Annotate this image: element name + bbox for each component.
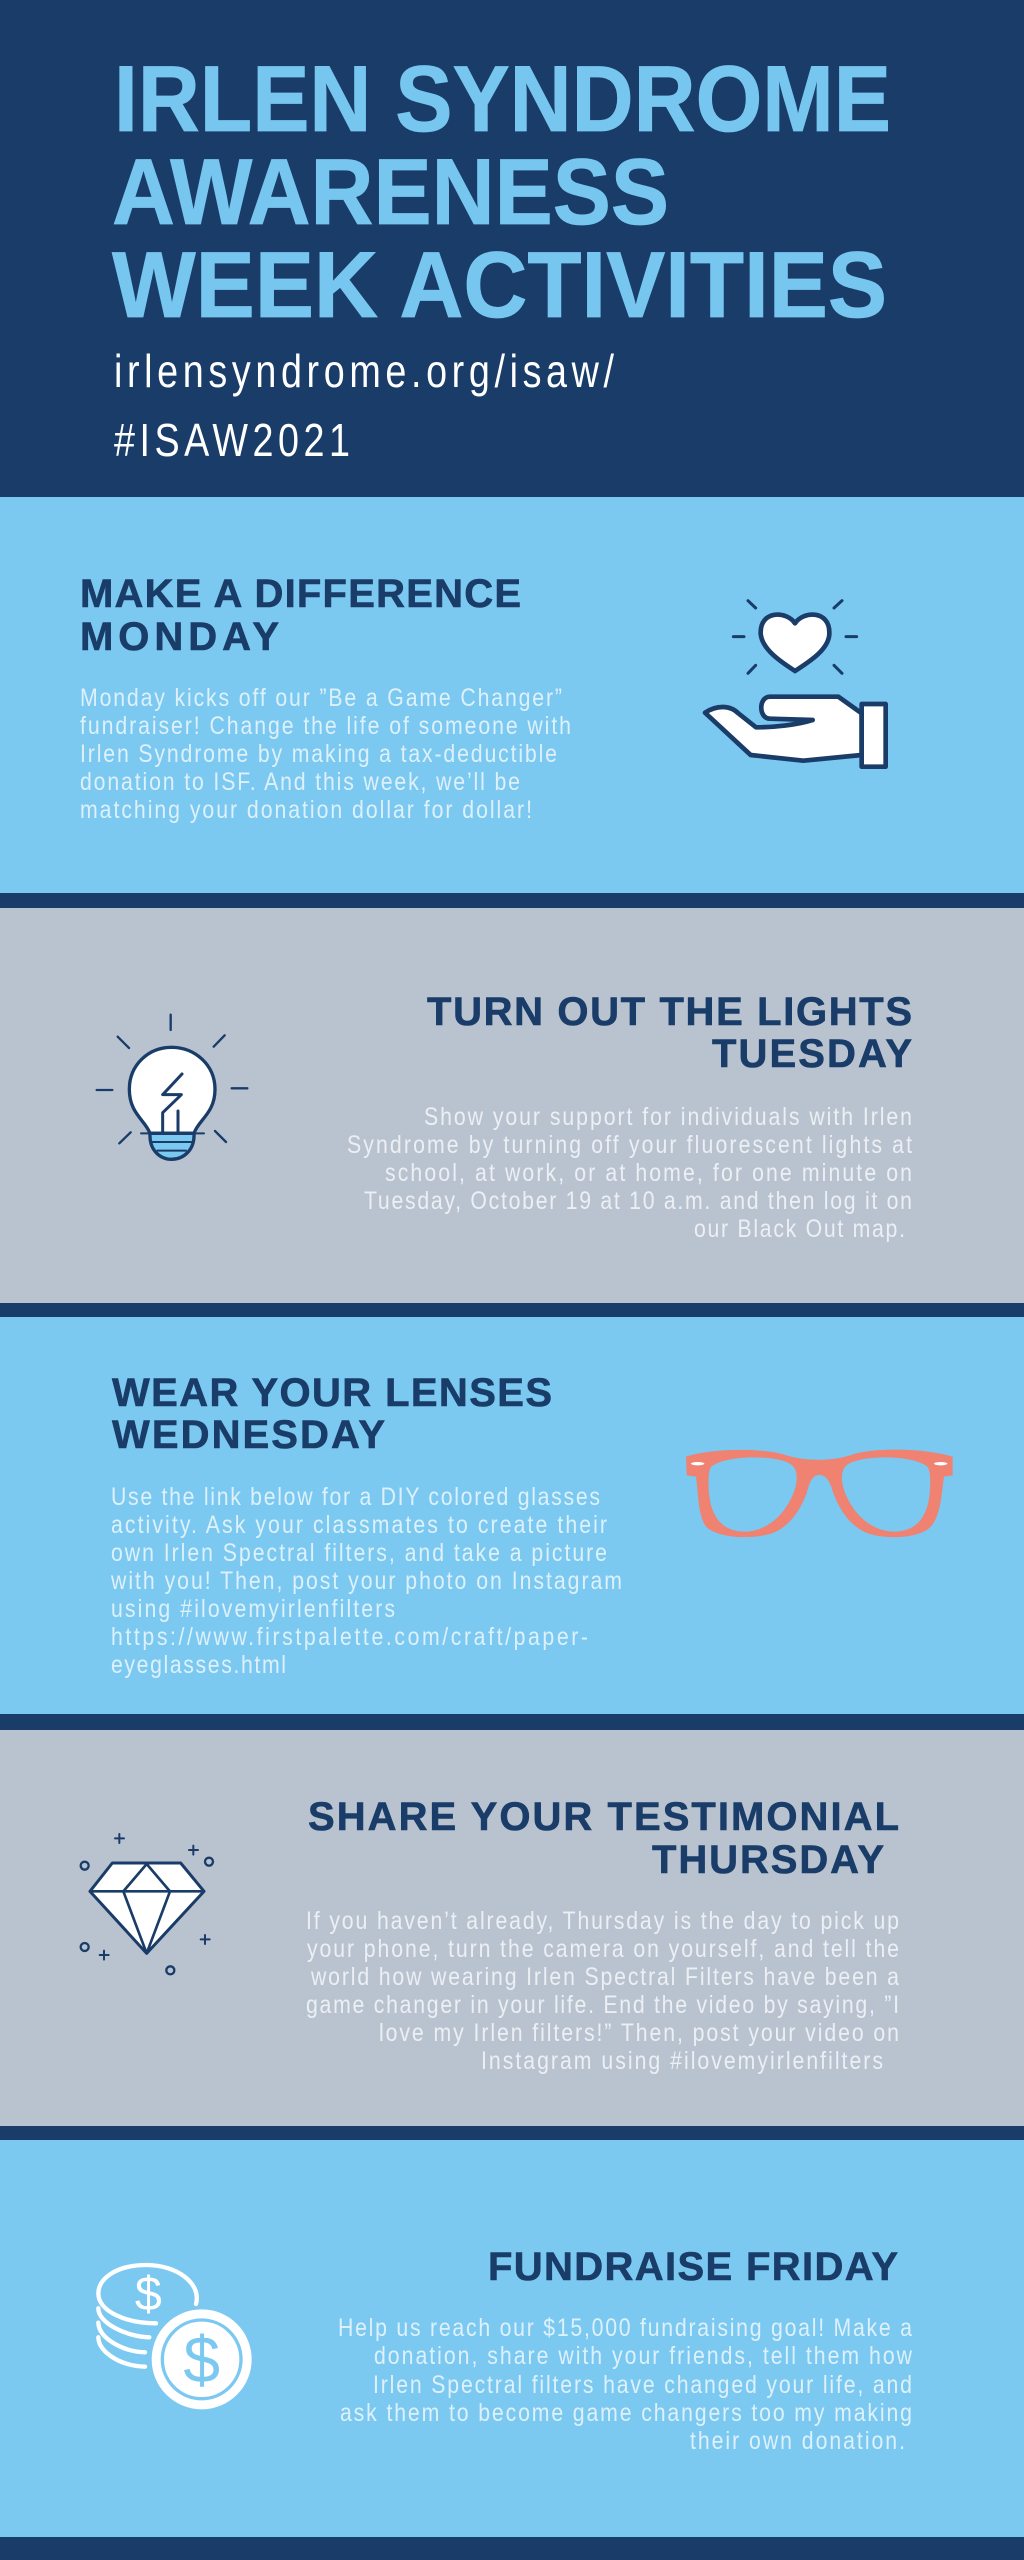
friday body text [338, 2313, 912, 2454]
wednesday body text: with you! Then, post your photo on Instagram [110, 1566, 622, 1594]
thursday body text: Instagram using #ilovemyirlenfilters [481, 2046, 883, 2074]
wednesday heading: WEDNESDAY [112, 1413, 385, 1457]
wednesday body text: using #ilovemyirlenfilters [111, 1594, 395, 1622]
thursday body text: If you haven’t already, Thursday is the day to pick up [306, 1906, 899, 1934]
panel: wednesday [0, 1317, 1024, 1714]
title [112, 46, 891, 337]
friday body text: Help us reach our $15,000 fundraising goal! Make a [338, 2313, 912, 2341]
tuesday body text: Show your support for individuals with Irlen [424, 1102, 912, 1130]
wednesday body text: eyeglasses.html [111, 1650, 286, 1678]
monday body text [80, 683, 571, 823]
title: WEEK ACTIVITIES [112, 232, 887, 337]
tuesday body text: our Black Out map. [694, 1214, 905, 1242]
icon: coins [98, 2265, 252, 2409]
panel: tuesday [0, 908, 1024, 1303]
panel: friday [0, 2140, 1024, 2537]
thursday body text: world how wearing Irlen Spectral Filters have been a [310, 1962, 899, 1990]
thursday body text: your phone, turn the camera on yourself, and tell the [307, 1934, 899, 1962]
monday heading: MONDAY [80, 615, 279, 659]
friday body text: donation, share with your friends, tell them how [374, 2341, 912, 2369]
panel: header [112, 46, 891, 466]
icon: coins: $ [135, 2267, 162, 2321]
wednesday background [0, 1317, 1024, 1714]
icon: coral glasses [686, 1450, 953, 1537]
tuesday body text: Syndrome by turning off your fluorescent lights at [347, 1130, 913, 1158]
monday background [0, 497, 1024, 893]
monday body text: Irlen Syndrome by making a tax-deductible [80, 739, 557, 767]
title: AWARENESS [112, 139, 669, 244]
hashtag: #ISAW2021 [114, 414, 350, 466]
thursday body text: love my Irlen filters!” Then, post your video on [379, 2018, 899, 2046]
thursday heading: SHARE YOUR TESTIMONIAL [308, 1795, 899, 1839]
icon: heart in hand [705, 601, 886, 767]
tuesday body text [347, 1102, 913, 1242]
wednesday body text: own Irlen Spectral filters, and take a picture [111, 1538, 607, 1566]
thursday heading [308, 1795, 899, 1882]
thursday body text: game changer in your life. End the video by saying, ”I [306, 1990, 899, 2018]
monday body text: donation to ISF. And this week, we’ll be [80, 767, 520, 795]
icon: light bulb [97, 1015, 247, 1159]
wednesday body text: Use the link below for a DIY colored glasses [111, 1482, 600, 1510]
title: IRLEN SYNDROME [114, 46, 891, 151]
tuesday body text: school, at work, or at home, for one minute on [385, 1158, 912, 1186]
monday body text: matching your donation dollar for dollar! [80, 795, 532, 823]
friday body text: ask them to become game changers too my making [340, 2398, 912, 2426]
icon: diamond [81, 1834, 213, 1974]
monday body text: Monday kicks off our ”Be a Game Changer” [80, 683, 562, 711]
wednesday heading: WEAR YOUR LENSES [112, 1371, 552, 1415]
friday heading: FUNDRAISE FRIDAY [488, 2245, 898, 2289]
thursday body text [306, 1906, 899, 2074]
thursday heading: THURSDAY [652, 1838, 884, 1882]
wednesday body text: https://www.firstpalette.com/craft/paper- [111, 1622, 588, 1650]
wednesday heading [112, 1371, 552, 1457]
friday background [0, 2140, 1024, 2537]
tuesday background [0, 908, 1024, 1303]
wednesday body text: activity. Ask your classmates to create their [111, 1510, 607, 1538]
monday heading: MAKE A DIFFERENCE [80, 572, 521, 616]
tuesday heading [427, 990, 912, 1076]
monday heading [80, 572, 521, 659]
thursday background [0, 1730, 1024, 2126]
website link: irlensyndrome.org/isaw/ [114, 345, 614, 397]
wednesday body text [110, 1482, 622, 1678]
friday body text: Irlen Spectral filters have changed your life, and [373, 2370, 912, 2398]
panel: monday [0, 497, 1024, 893]
icon: coins: $ [183, 2322, 220, 2396]
friday body text: their own donation. [690, 2426, 905, 2454]
tuesday heading: TUESDAY [712, 1032, 912, 1076]
panel: thursday [0, 1730, 1024, 2126]
tuesday heading: TURN OUT THE LIGHTS [427, 990, 912, 1034]
monday body text: fundraiser! Change the life of someone with [80, 711, 571, 739]
tuesday body text: Tuesday, October 19 at 10 a.m. and then log it on [364, 1186, 912, 1214]
